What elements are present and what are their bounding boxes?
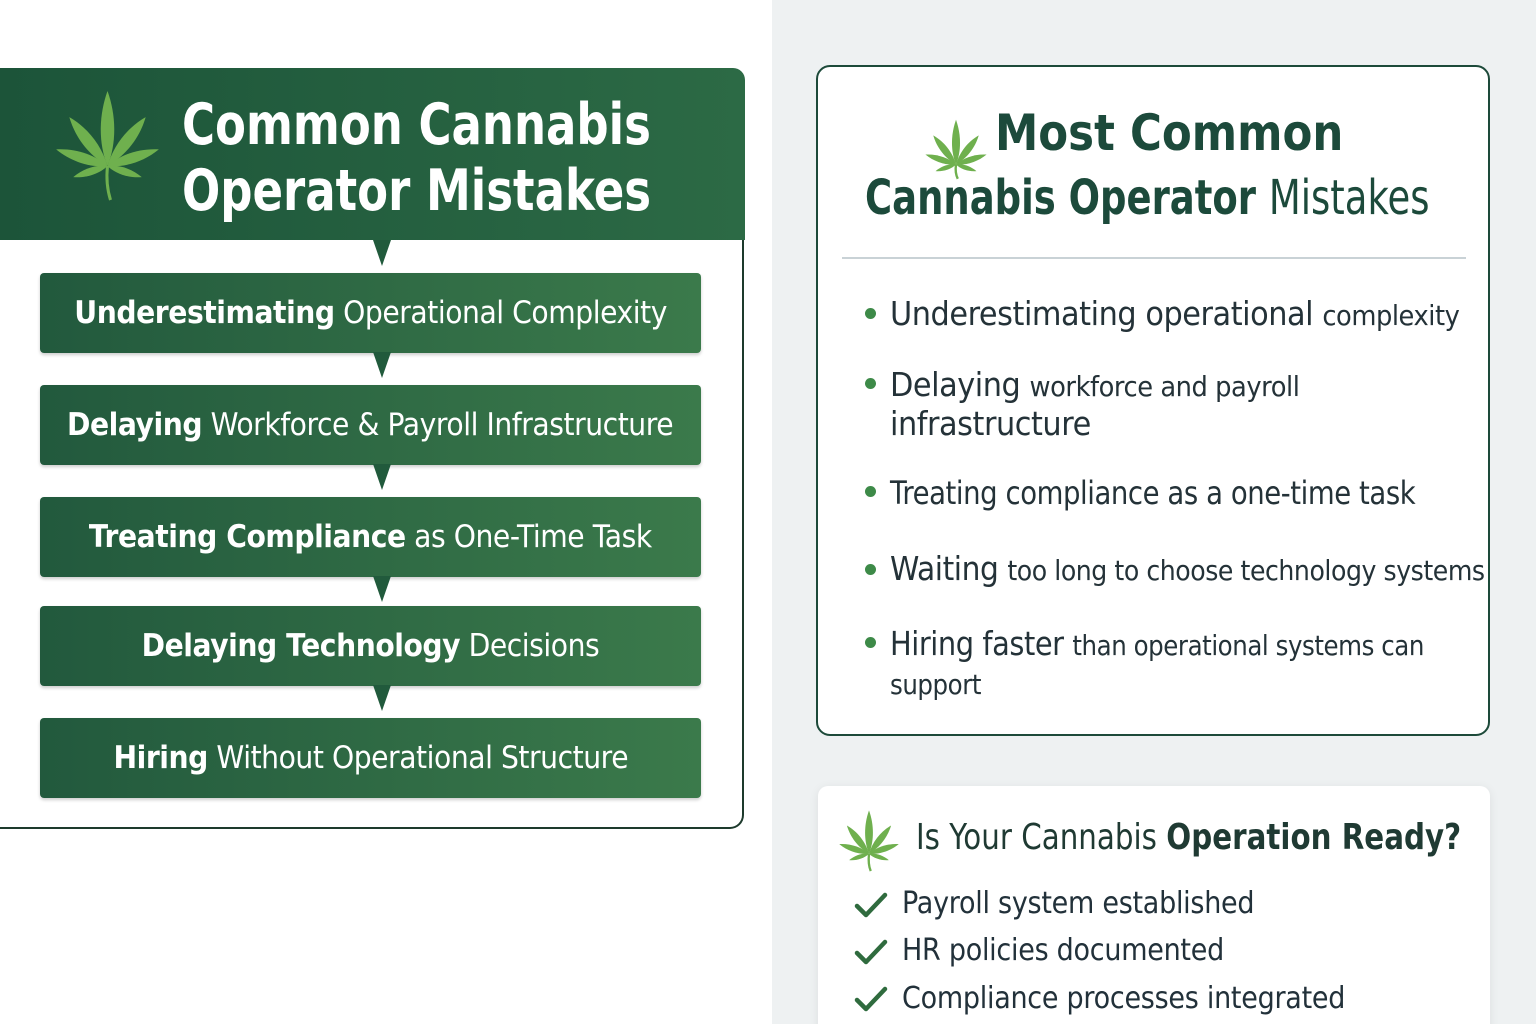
title: Operator Mistakes <box>182 158 651 224</box>
heading: right card title: Most Common <box>995 104 1343 162</box>
bar: mistake 3: Treating Compliance as One-Time Task <box>89 519 652 555</box>
text: Compliance processes integrated <box>902 981 1345 1016</box>
header: left title band <box>0 68 745 240</box>
text: HR policies documented <box>902 933 1224 968</box>
checklist <box>854 886 1345 1016</box>
bullet list <box>865 294 1485 701</box>
icon: cannabis leaf <box>56 91 159 200</box>
arrow <box>373 464 391 490</box>
bar: mistake 5 <box>40 718 701 798</box>
heading: readiness question: Is Your Cannabis Operation Ready? <box>916 817 1461 858</box>
text: Payroll system established <box>902 886 1254 921</box>
panel: readiness checklist <box>818 786 1490 1024</box>
text: Waiting too long to choose technology systems <box>890 549 1485 588</box>
title <box>182 92 651 224</box>
bar: mistake 2: Delaying Workforce & Payroll Infrastructure <box>67 407 674 443</box>
text: infrastructure <box>890 404 1091 443</box>
arrow <box>373 352 391 378</box>
icon: small cannabis leaf <box>926 120 986 180</box>
icon: leaf <box>839 810 899 872</box>
text: Underestimating operational complexity <box>890 294 1459 333</box>
bar: mistake 1 <box>40 273 701 353</box>
bar: mistake 5: Hiring Without Operational Structure <box>113 740 628 776</box>
bar: mistake 3 <box>40 497 701 577</box>
title: Common Cannabis <box>182 92 651 158</box>
bar: mistake 4: Delaying Technology Decisions <box>142 628 599 664</box>
text: Delaying workforce and payroll <box>890 365 1299 404</box>
arrow <box>373 576 391 602</box>
arrow <box>373 685 391 711</box>
heading line 2: Cannabis Operator Mistakes <box>865 170 1430 226</box>
bar: mistake 2 <box>40 385 701 465</box>
text: Treating compliance as a one-time task <box>890 474 1415 512</box>
bar: mistake 4 <box>40 606 701 686</box>
panel: most common mistakes card <box>816 65 1490 736</box>
text: Hiring faster than operational systems can <box>890 624 1424 663</box>
text: support <box>890 668 981 701</box>
bar: mistake 1: Underestimating Operational Complexity <box>74 295 667 331</box>
arrow: header to bar 1 <box>373 240 391 266</box>
panel: left mistakes list <box>0 68 744 829</box>
